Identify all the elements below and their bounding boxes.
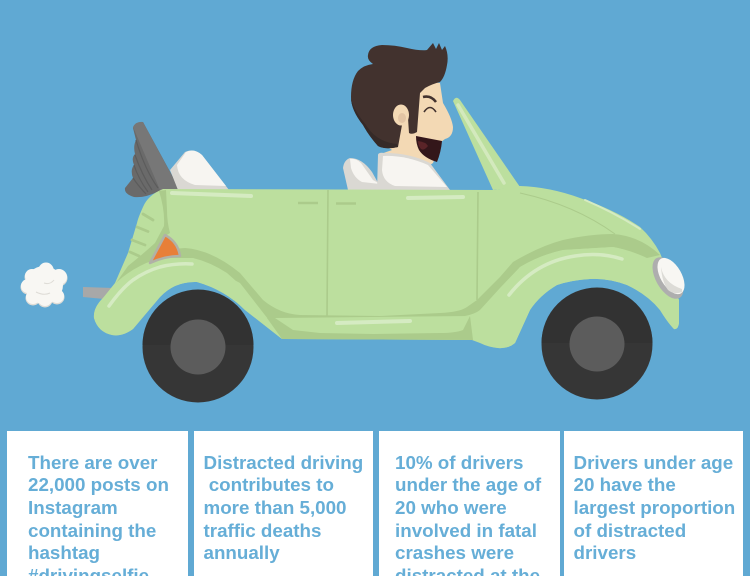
driver — [351, 43, 453, 190]
sill — [267, 316, 473, 340]
exhaust smoke puff — [20, 262, 68, 308]
panel: drivers under 20 in fatal crashes fact — [379, 431, 560, 576]
hair — [351, 43, 448, 148]
headlight — [646, 252, 690, 304]
neck and face — [377, 80, 453, 165]
front wheel — [542, 288, 652, 400]
folded convertible top — [125, 122, 180, 197]
rear seat — [170, 151, 229, 190]
highlights — [172, 193, 463, 323]
panel: Instagram posts fact — [7, 431, 188, 576]
text: largest proportion fact: Drivers under age 20 have the largest proportion of distracted drivers — [574, 452, 735, 563]
body contour band — [116, 234, 660, 319]
door seams — [327, 190, 478, 317]
ear — [393, 104, 409, 126]
panel: traffic deaths fact — [194, 431, 373, 576]
driver seat — [343, 158, 382, 190]
panel: largest proportion fact — [564, 431, 743, 576]
windshield — [453, 98, 520, 190]
tail light — [150, 235, 180, 263]
exhaust pipe — [83, 287, 114, 299]
rear fender — [94, 258, 282, 339]
illustration: driver in green convertible car — [20, 43, 684, 402]
text: traffic deaths fact: Distracted driving contributes to more than 5,000 traffic deaths annually — [204, 452, 363, 563]
shirt — [377, 153, 450, 190]
rear wheel — [142, 290, 254, 402]
car body — [94, 186, 679, 348]
front fender lobe — [472, 247, 679, 348]
eyebrow and closed eye — [423, 97, 436, 112]
mouth — [416, 136, 442, 162]
rear panel seam and vents — [116, 190, 170, 283]
